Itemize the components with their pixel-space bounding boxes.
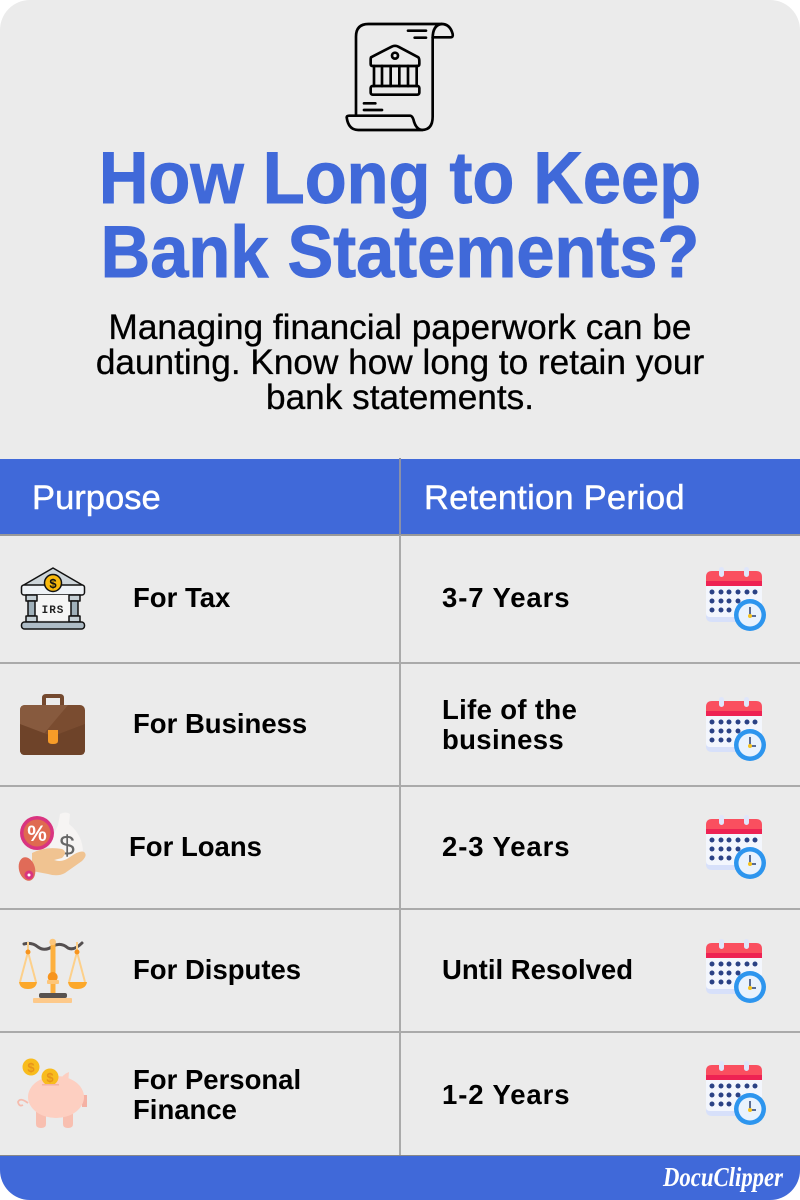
icon: IRS building: $ — [49, 576, 57, 591]
icon: bank document scroll — [345, 22, 454, 132]
icon: briefcase — [20, 694, 85, 755]
label: For Personal Finance: For Personal — [133, 1064, 301, 1095]
value: 2-3 Years: 2-3 Years — [442, 831, 570, 862]
row: For Disputes — [19, 938, 766, 1003]
value: 1-2 Years: 1-2 Years — [442, 1079, 570, 1110]
subtitle: bank statements. — [266, 378, 534, 417]
value: Life of the business: business — [442, 724, 564, 755]
title — [99, 138, 701, 293]
header: Purpose: Purpose — [32, 479, 161, 517]
label: For Business: For Business — [133, 708, 307, 739]
label: For Tax: For Tax — [133, 582, 230, 613]
value: Life of the business: Life of the — [442, 694, 577, 725]
label: For Personal Finance — [133, 1064, 301, 1125]
footer band — [0, 1155, 800, 1200]
title: Bank Statements? — [101, 212, 699, 293]
subtitle — [96, 308, 704, 417]
label: For Personal Finance: Finance — [133, 1094, 237, 1125]
icon: calendar — [706, 697, 766, 761]
value: Life of the business — [442, 694, 577, 755]
value: 3-7 Years: 3-7 Years — [442, 582, 570, 613]
subtitle: daunting. Know how long to retain your — [96, 343, 704, 382]
row: For Business — [20, 694, 766, 761]
label: For Loans: For Loans — [129, 831, 262, 862]
icon: piggy bank with coins: $ — [46, 1070, 54, 1085]
icon: calendar — [706, 1061, 766, 1125]
subtitle: Managing financial paperwork can be — [109, 308, 691, 347]
icon: calendar — [706, 939, 766, 1003]
header: Retention Period: Retention Period — [424, 479, 685, 517]
icon: piggy bank with coins: $ — [27, 1060, 35, 1075]
row: For Loans — [18, 812, 766, 881]
icon: balance scale — [19, 938, 87, 1003]
row: For Personal Finance — [17, 1058, 766, 1128]
icon: calendar — [706, 815, 766, 879]
icon: calendar — [706, 567, 766, 631]
title: How Long to Keep — [99, 138, 701, 219]
table header band — [0, 459, 800, 535]
value: Until Resolved: Until Resolved — [442, 954, 633, 985]
icon: IRS building — [20, 567, 86, 630]
icon: piggy bank with coins — [17, 1058, 87, 1128]
label: For Disputes: For Disputes — [133, 954, 301, 985]
icon: hand with percent and money bag: % — [27, 821, 47, 846]
icon: IRS building: IRS — [42, 605, 64, 617]
icon: hand with percent and money bag — [18, 812, 86, 881]
icon: hand with percent and money bag: $ — [59, 830, 75, 861]
row: For Tax — [20, 567, 766, 631]
